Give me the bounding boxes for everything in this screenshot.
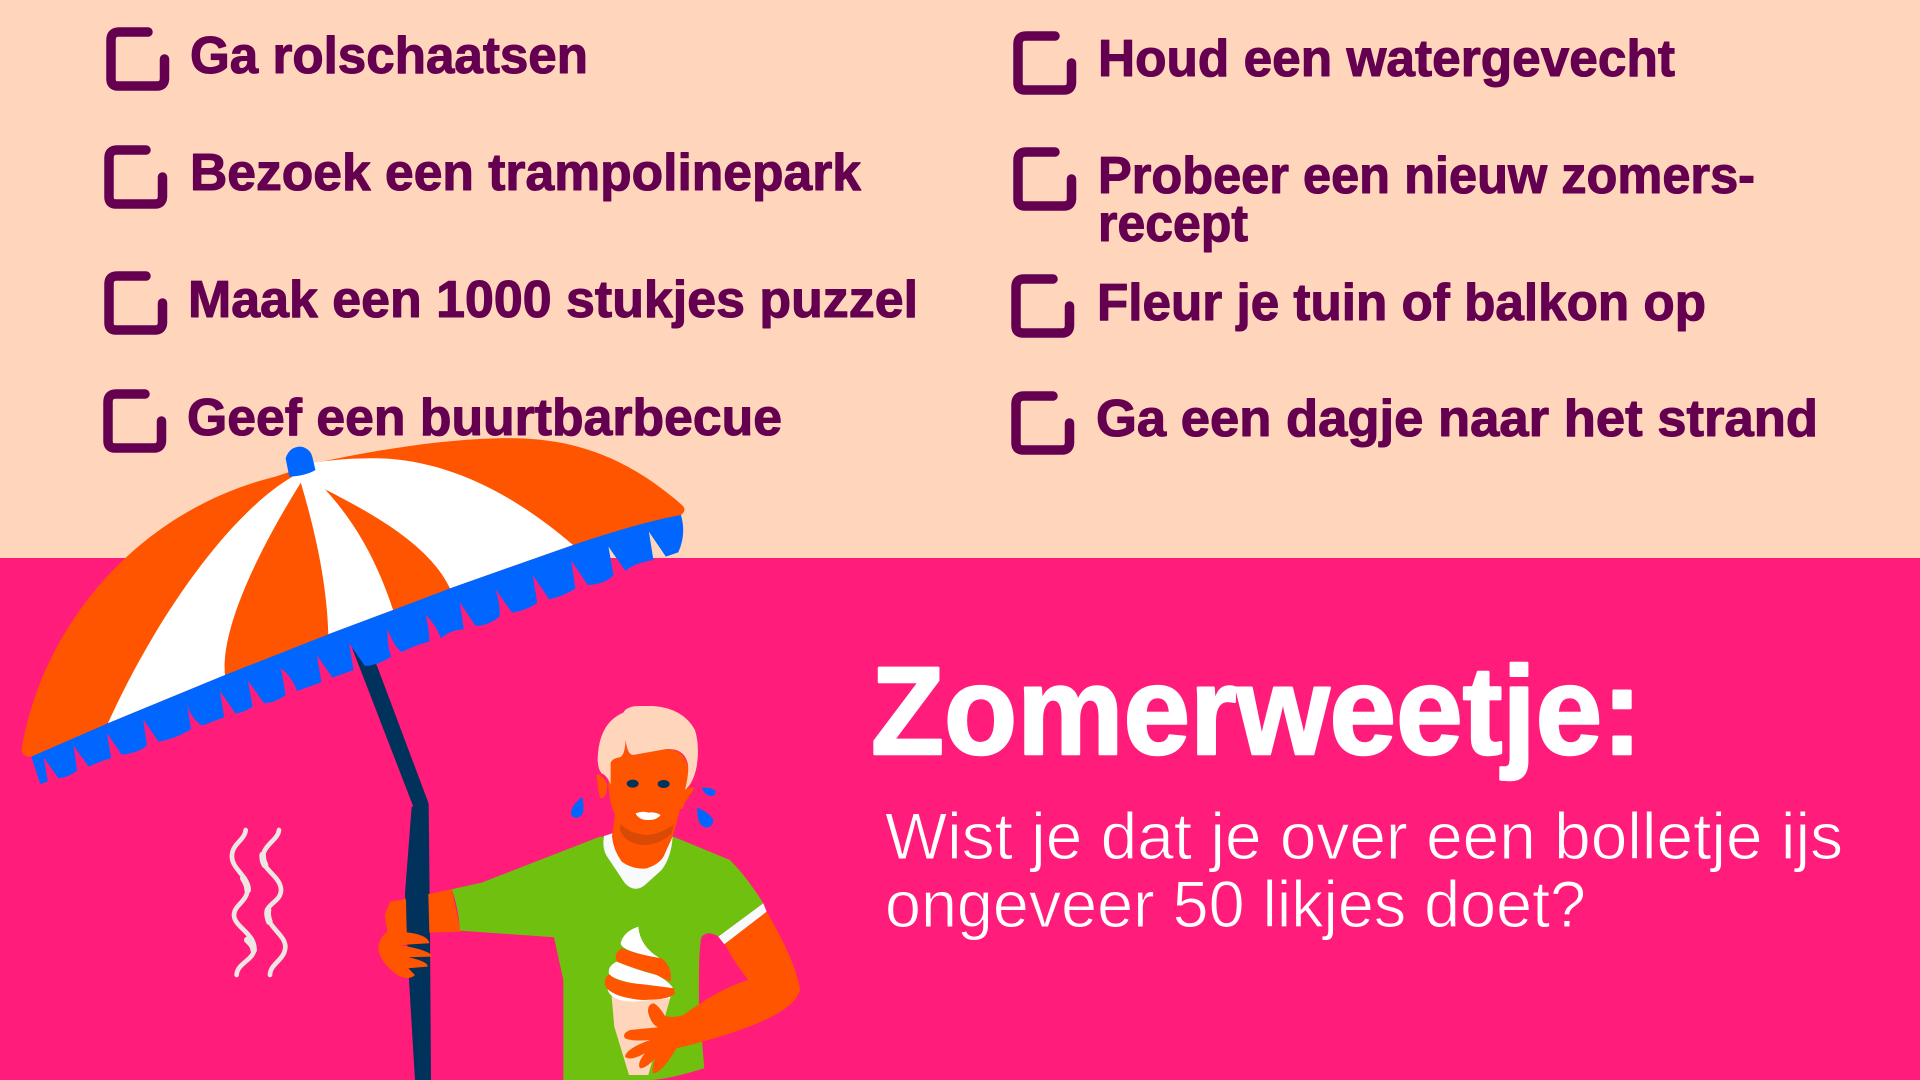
panel: peach background [0, 0, 1920, 558]
sleeve trim [718, 903, 767, 944]
ice cream swirl [605, 927, 675, 1002]
illustration: pole [350, 643, 431, 1080]
item: Houd een watergevecht: Houd een watergevecht [1098, 30, 1675, 88]
item: Probeer een nieuw zomersrecept: Probeer een nieuw zomers- [1098, 147, 1755, 205]
checkbox: zomersrecept [1018, 152, 1072, 206]
illustration: umbrella [22, 438, 684, 784]
item: Probeer een nieuw zomersrecept [1098, 147, 1755, 253]
illustration: person with ice cream [378, 706, 800, 1080]
heading: Zomerweetje: Zomerweetje: [871, 642, 1642, 781]
ears [597, 774, 694, 809]
umbrella white panels [108, 458, 573, 723]
umbrella finial [286, 447, 315, 477]
item: Probeer een nieuw zomersrecept: recept [1098, 195, 1248, 253]
left hand [378, 899, 432, 978]
item: Ga rolschaatsen: Ga rolschaatsen [190, 27, 588, 85]
checklist: right column [1016, 30, 1818, 450]
text block: fact [885, 799, 1843, 941]
checkbox: strand [1016, 396, 1070, 450]
neck [612, 810, 680, 869]
collar [603, 827, 673, 889]
text block: fact: ongeveer 50 likjes doet? [885, 867, 1586, 941]
item: Maak een 1000 stukjes puzzel: Maak een 1000 stukjes puzzel [188, 271, 918, 329]
mouth [636, 812, 661, 820]
eyes [627, 780, 670, 788]
sweat drops [571, 788, 716, 827]
text block: fact: Wist je dat je over een bolletje ijs [885, 799, 1843, 873]
ice cream cup [612, 997, 671, 1075]
hair [598, 706, 698, 790]
checklist: left column [108, 27, 918, 448]
face [608, 740, 688, 835]
checkbox: rolschaatsen [111, 32, 164, 86]
item: Bezoek een trampolinepark: Bezoek een trampolinepark [190, 144, 861, 202]
checkbox: watergevecht [1018, 36, 1072, 90]
checkbox: tuin of balkon [1016, 279, 1070, 333]
neck shadow [620, 824, 674, 845]
checkbox: trampolinepark [109, 150, 162, 204]
icon: heat waves [232, 830, 285, 975]
checkbox: buurtbarbecue [108, 394, 162, 448]
item: Ga een dagje naar het strand: Ga een dagje naar het strand [1096, 390, 1818, 448]
left forearm [428, 889, 461, 933]
umbrella fringe [31, 515, 683, 784]
item: Fleur je tuin of balkon op: Fleur je tuin of balkon op [1097, 274, 1706, 332]
checkbox: puzzel [109, 276, 162, 330]
shirt [452, 837, 763, 1080]
panel: pink background [0, 558, 1920, 1080]
item: Geef een buurtbarbecue: Geef een buurtbarbecue [187, 389, 782, 447]
umbrella canopy orange [22, 438, 684, 757]
right arm and hand [624, 912, 800, 1073]
